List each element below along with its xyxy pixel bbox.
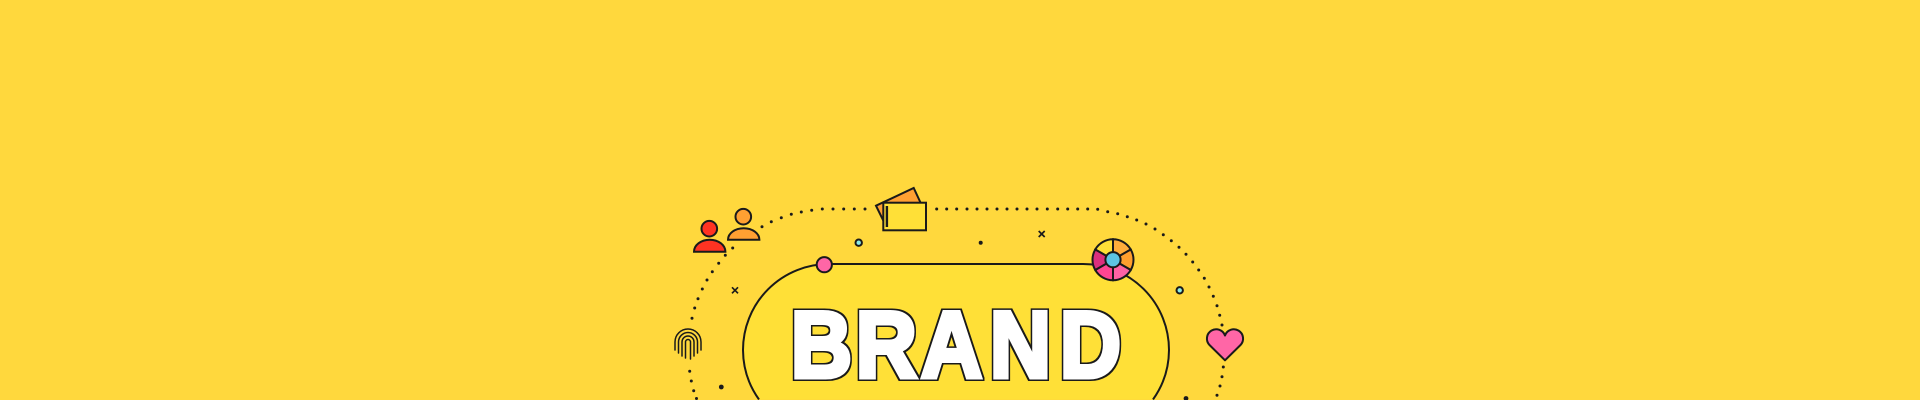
icon: heart: [1207, 329, 1243, 360]
icon: teal dot left: [856, 240, 862, 246]
icon: black dot top: [979, 241, 983, 245]
icon: colour wheel: [1093, 239, 1133, 280]
icon: cards: [876, 188, 926, 230]
icon: black dot lower left: [719, 385, 724, 389]
dotted orbit path: [688, 208, 1225, 400]
icon: cross left: [732, 287, 738, 293]
icon: black dot bottom right: [1184, 396, 1188, 400]
central pill: [743, 264, 1169, 400]
heading: BRAND: BRAND: [791, 292, 1121, 397]
icon: cross right: [1039, 231, 1045, 237]
icon: fingerprint: [675, 329, 701, 359]
icon: orange person: [728, 209, 759, 240]
icon: red person: [694, 221, 725, 252]
icon: teal dot right: [1176, 287, 1183, 293]
icon: pink node: [817, 257, 832, 272]
